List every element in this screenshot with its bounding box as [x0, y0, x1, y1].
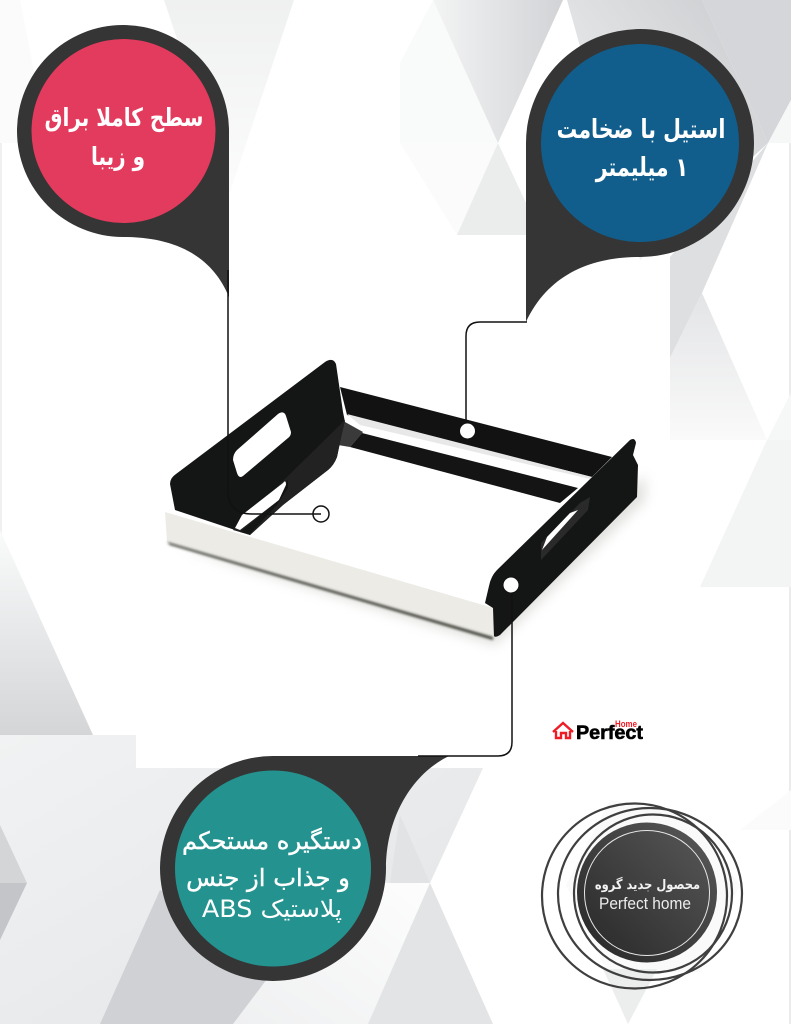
reflection corner [338, 422, 363, 447]
badge text line 2: Perfect home [599, 895, 691, 913]
lip underside shadow [167, 542, 493, 640]
back bar [340, 387, 612, 477]
inner thin ring [584, 830, 710, 956]
teal bubble text line 2: و جذاب از جنس [186, 864, 350, 892]
badge: new product of Perfect home group [542, 804, 742, 988]
callout: teal bubble, ABS handle [160, 577, 519, 981]
right handle cut-out [541, 497, 590, 560]
back bar shine [347, 414, 592, 479]
back bar reflection [350, 433, 578, 503]
tray shadow [180, 475, 645, 645]
leader line to handle [418, 585, 512, 756]
left handle [170, 360, 345, 535]
tray mirror floor [165, 435, 592, 608]
callout: red bubble, glossy surface [17, 25, 329, 522]
left handle cut-out [233, 412, 291, 477]
red bubble pin shape [17, 25, 229, 297]
icon: red house [553, 723, 573, 738]
red circle [32, 39, 216, 223]
blue circle [541, 44, 739, 242]
concentric outline rings [542, 804, 742, 988]
right cut-out highlight [542, 510, 578, 550]
teal bubble text line 3: پلاستیک ABS [202, 895, 342, 923]
mirrored cut-out reflection [235, 481, 286, 530]
left handle reflected lower part [233, 420, 345, 535]
blue bubble text line 1: استیل با ضخامت [557, 114, 725, 145]
marker: surface [313, 506, 329, 522]
marker: handle [503, 577, 519, 593]
red bubble text line 2: و زیبا [91, 143, 145, 172]
mirrored handle stripe [240, 479, 288, 534]
front steel lip [165, 512, 493, 637]
blue bubble text line 2: ۱ میلیمتر [595, 152, 688, 183]
blue bubble pin shape [526, 29, 754, 322]
right handle [485, 439, 638, 637]
teal bubble pin shape [160, 756, 449, 981]
logo word: Perfect: Perfect [576, 722, 644, 744]
dark disc [577, 822, 717, 962]
product: steel tray with black handles [165, 360, 645, 645]
marker: steel [460, 423, 476, 439]
badge text line 1: محصول جدید گروه [595, 876, 700, 892]
teal bubble text line 1: دستگیره مستحکم [182, 827, 362, 855]
teal circle [175, 770, 371, 966]
red bubble text line 1: سطح کاملا براق [45, 104, 203, 133]
leader line to surface [228, 270, 321, 514]
leader line to steel [466, 322, 527, 430]
brand logo [553, 719, 644, 744]
logo word: Home: Home [615, 719, 637, 729]
callout: blue bubble, steel thickness [460, 29, 754, 439]
